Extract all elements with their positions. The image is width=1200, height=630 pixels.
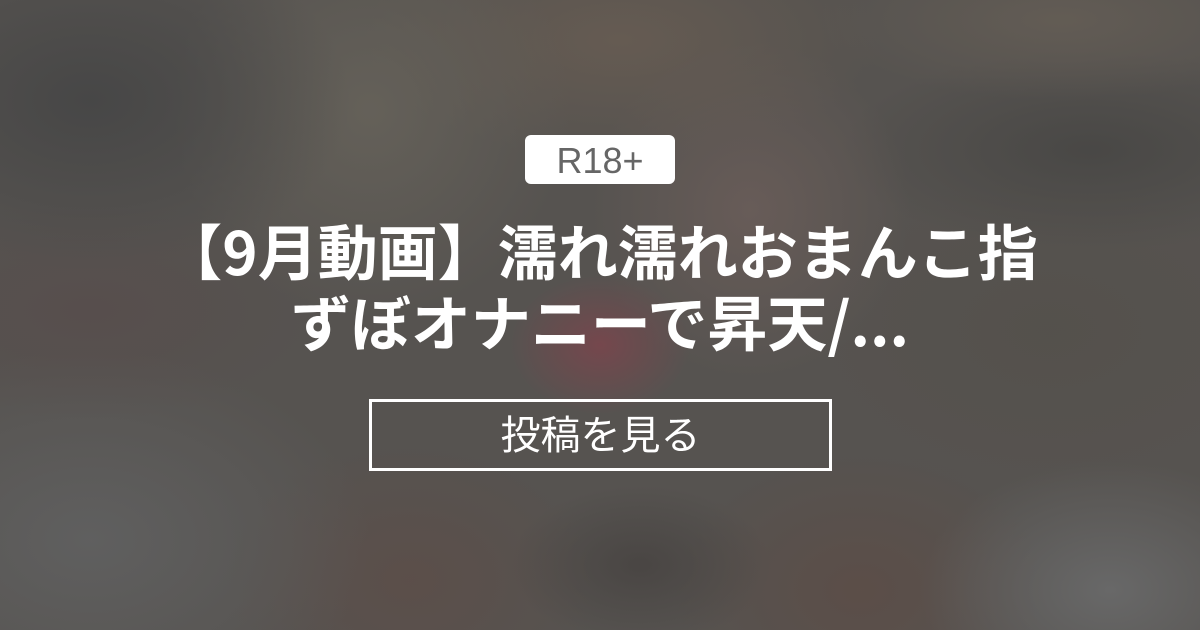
button: view post: 投稿を見る	[500, 414, 700, 458]
button: view post	[369, 399, 832, 471]
title: 【9月動画】濡れ濡れおまんこ指	[162, 206, 1038, 293]
title: ずぼオナニーで昇天/...	[291, 277, 909, 364]
badge: R18+: R18+	[556, 140, 644, 181]
badge: R18+	[525, 135, 675, 184]
title	[162, 206, 1038, 364]
